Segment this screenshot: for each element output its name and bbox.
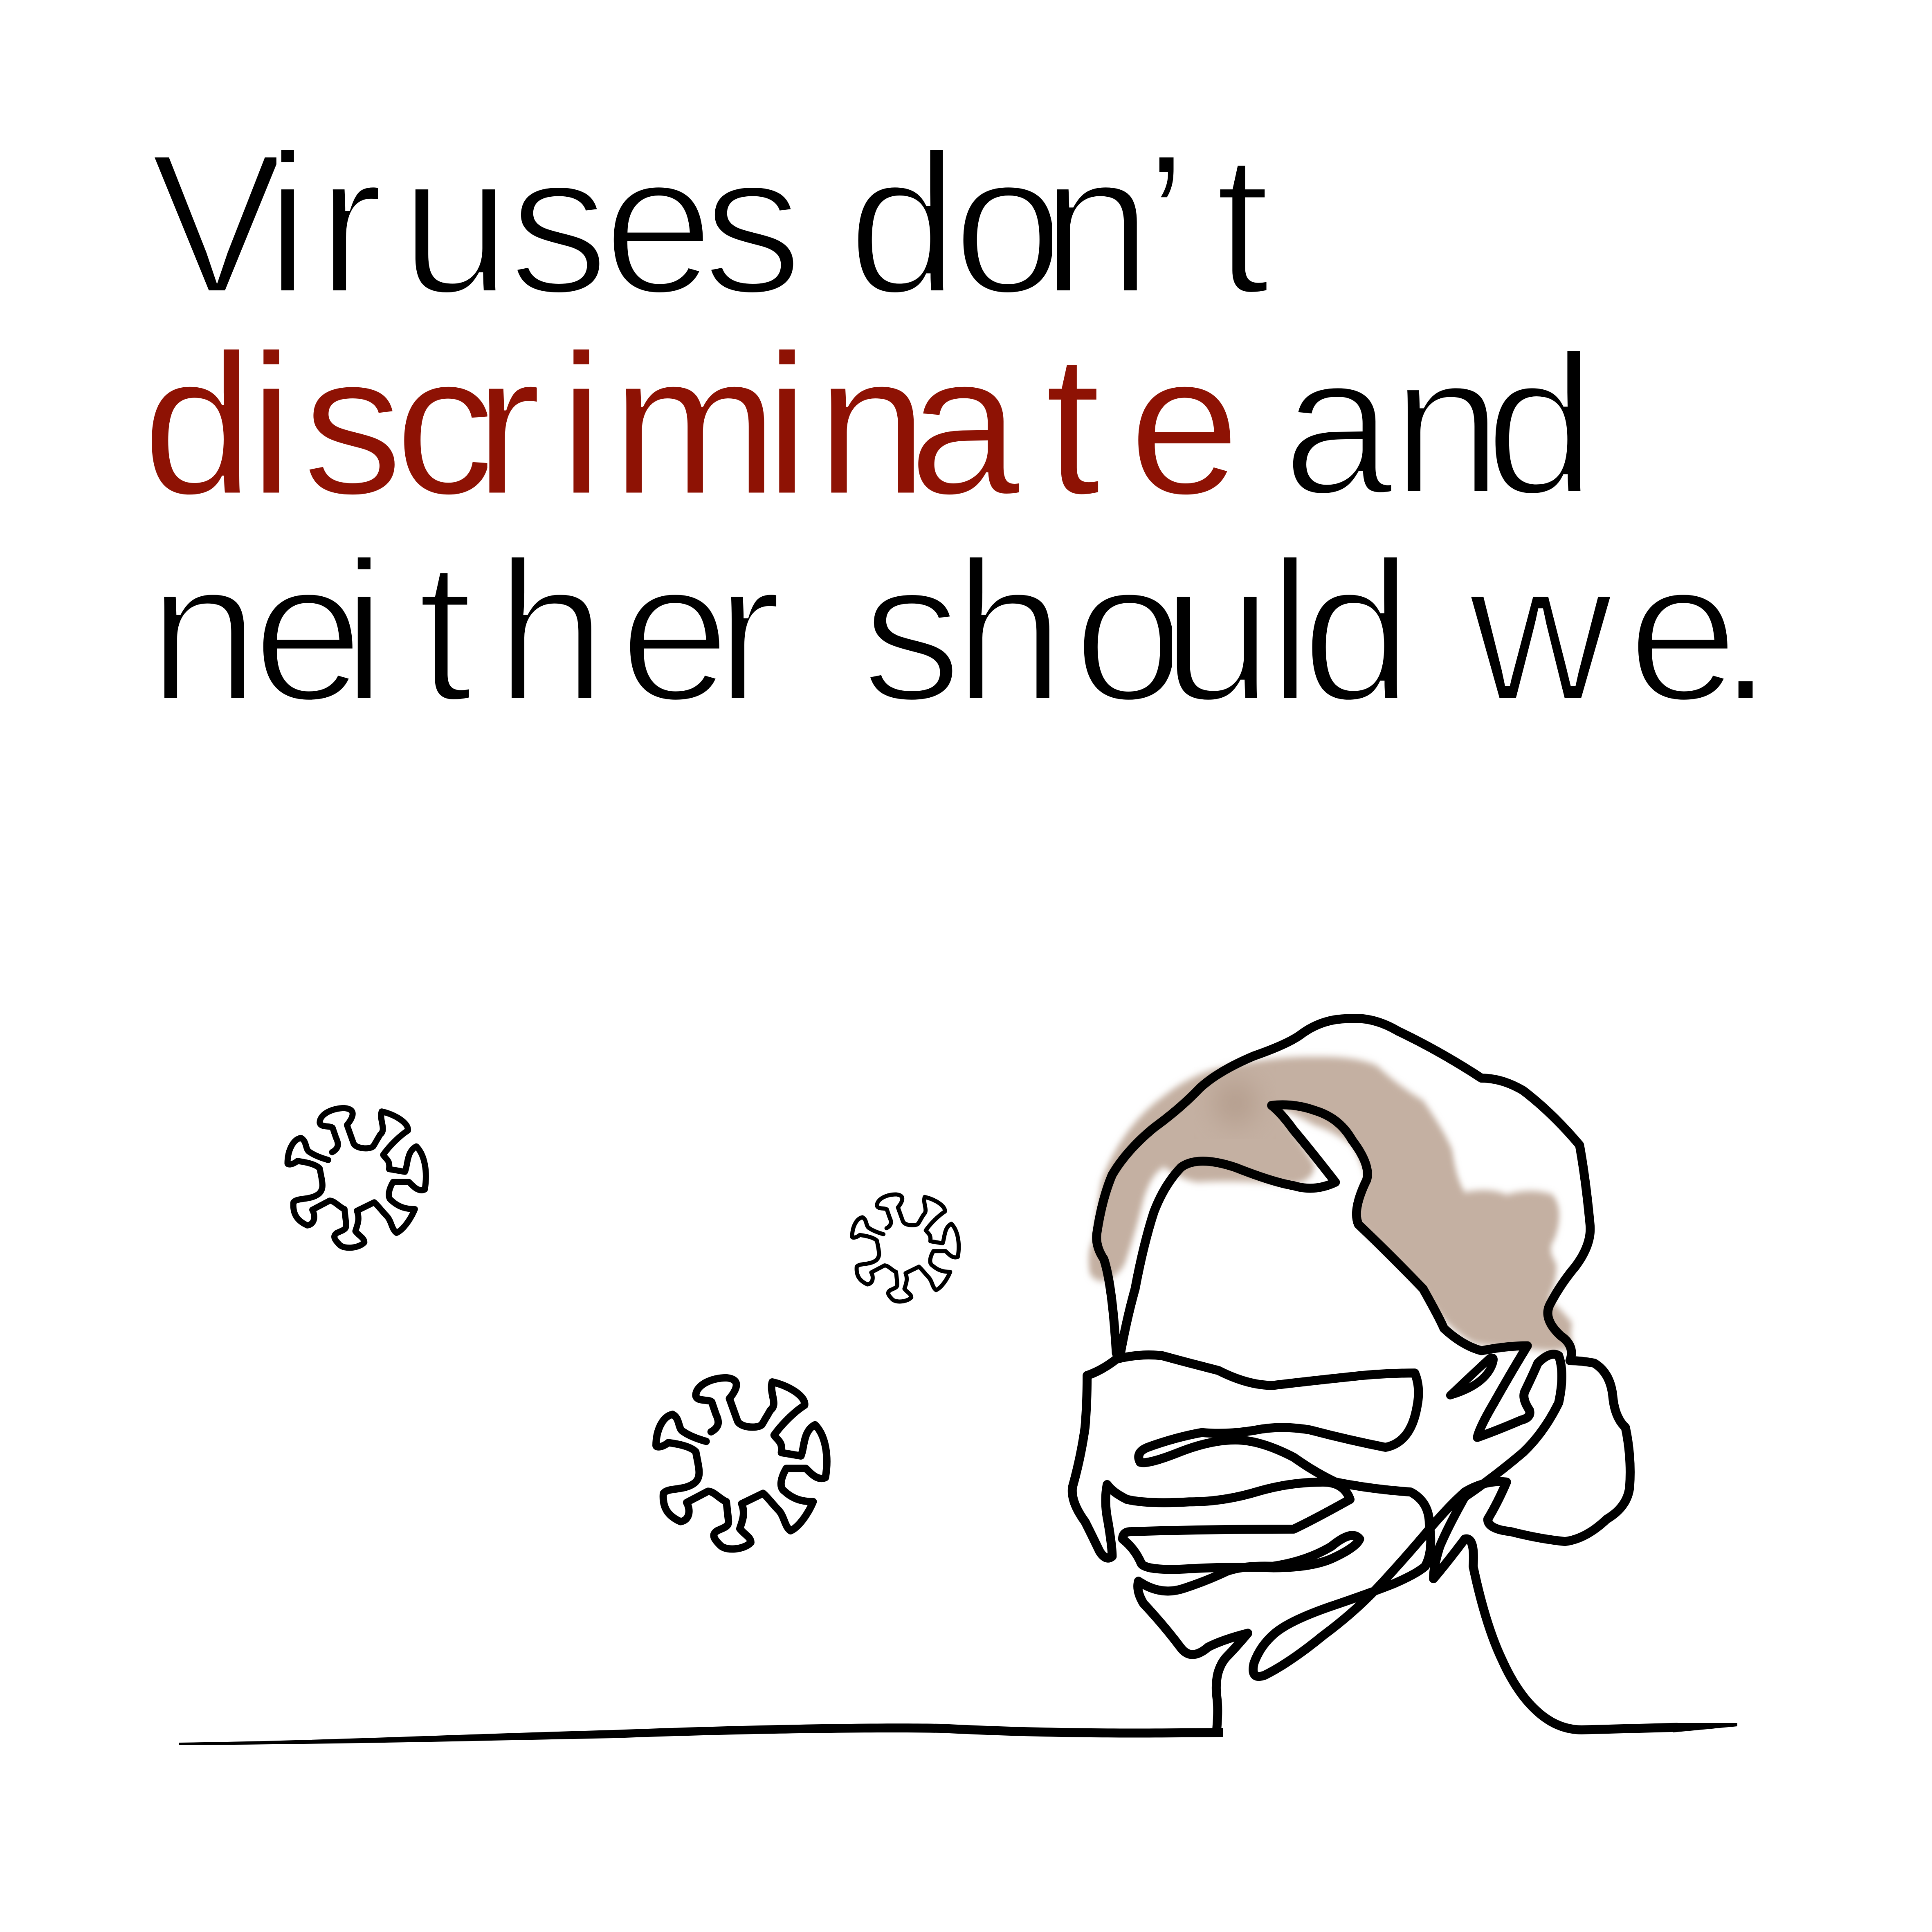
face, mask and bun line bbox=[1072, 1355, 1630, 1732]
title line 2 with red highlighted word: and bbox=[1282, 312, 1596, 536]
ground line right bbox=[1673, 1723, 1737, 1732]
icon: virus small centre bbox=[852, 1194, 959, 1301]
title line 3: neither bbox=[148, 519, 782, 743]
illustration: masked figure bbox=[1072, 1018, 1677, 1732]
title line 2 with red highlighted word: discriminate bbox=[142, 312, 1240, 536]
ear detail bbox=[1450, 1358, 1494, 1395]
hair outer line bbox=[1096, 1018, 1590, 1361]
icon: virus top left bbox=[288, 1108, 426, 1248]
icon: virus large bottom bbox=[656, 1378, 827, 1549]
title line 3: we. bbox=[1465, 519, 1773, 743]
title line 1: Viruses bbox=[150, 111, 803, 335]
title bbox=[142, 111, 1773, 743]
title line 1: don’t bbox=[847, 111, 1271, 335]
title line 3 bbox=[148, 519, 1773, 743]
title line 3: should bbox=[862, 519, 1413, 743]
hair watercolour wash bbox=[1089, 1057, 1573, 1351]
hairline, ear strap and neck line bbox=[1121, 1105, 1677, 1730]
title line 1 bbox=[150, 111, 1271, 335]
ground line left bbox=[179, 1723, 1223, 1745]
